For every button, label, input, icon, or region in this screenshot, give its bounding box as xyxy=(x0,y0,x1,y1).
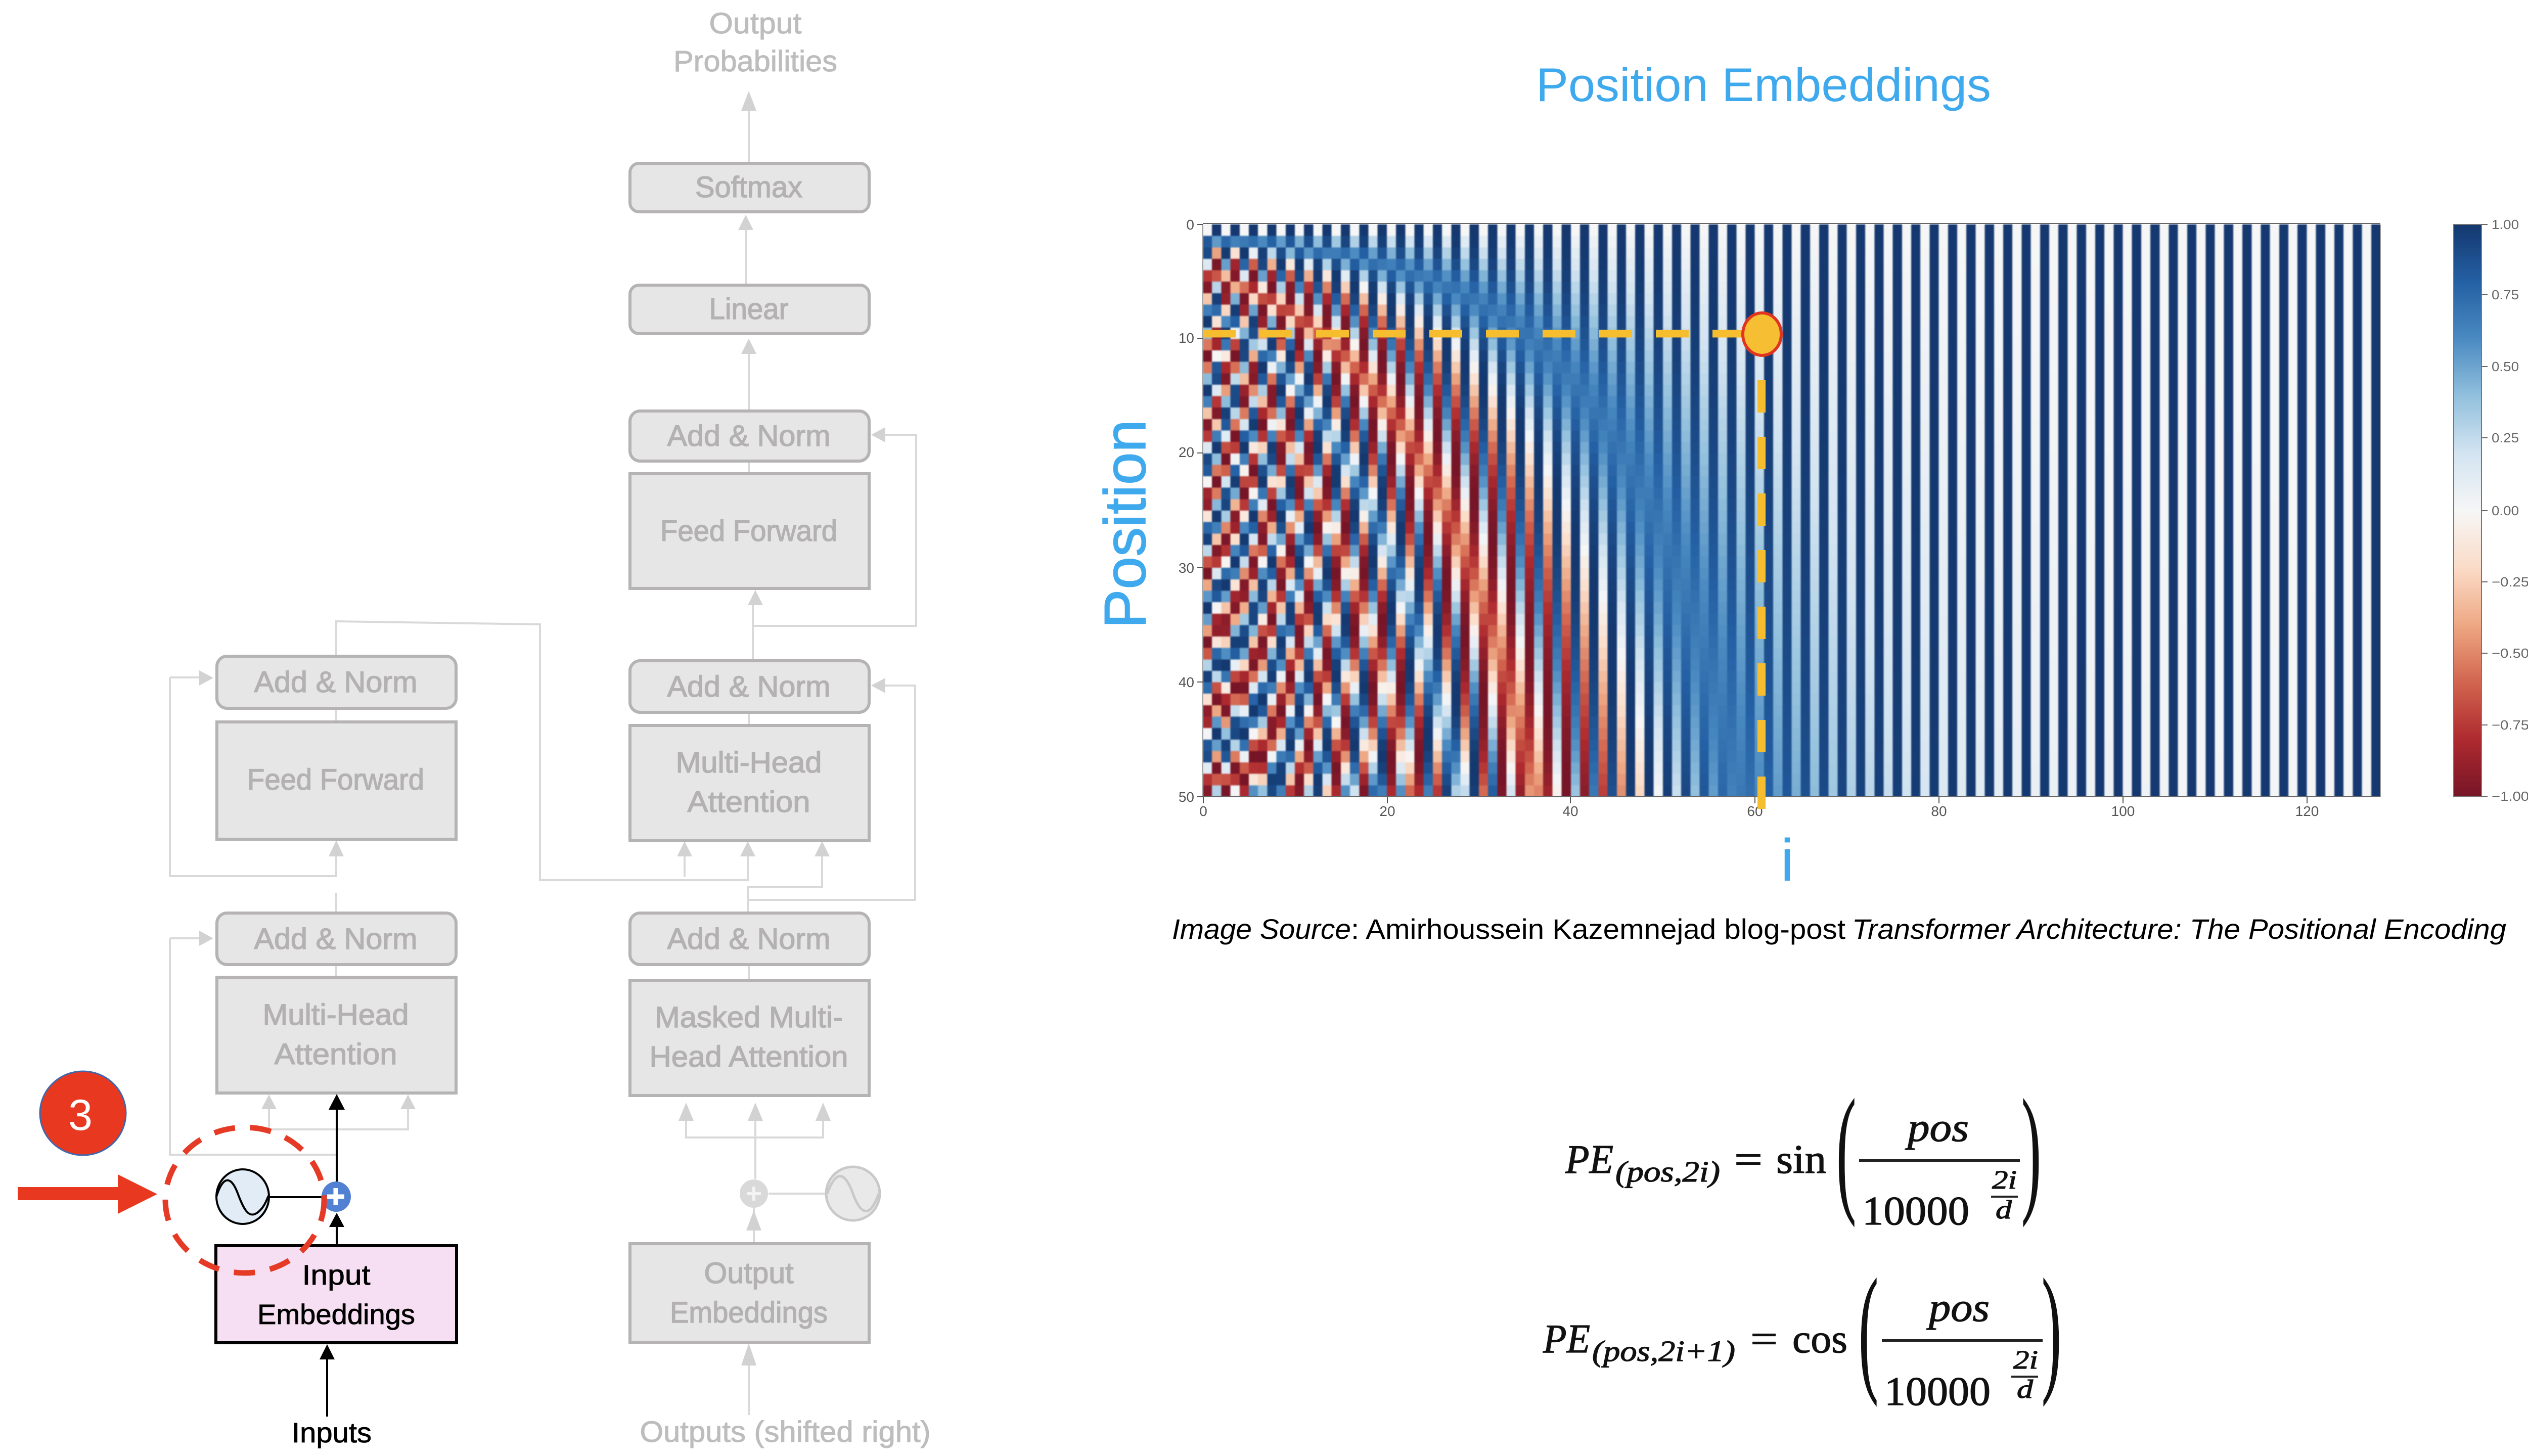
formula: sine positional encoding: sin xyxy=(1776,1138,1826,1182)
box: encoder lower Add and Norm xyxy=(217,913,456,965)
formula: sine positional encoding: = xyxy=(1734,1138,1763,1182)
chart axes: 0 xyxy=(1199,803,1207,819)
icon: greyed decoder plus xyxy=(740,1179,768,1208)
highlight: dashed row guide xyxy=(1203,330,1744,338)
caption: image source: : Amirhoussein Kazemnejad blog-post xyxy=(1351,913,1845,945)
formula: sine positional encoding: 2i xyxy=(1992,1166,2017,1195)
box: Output Embeddings xyxy=(630,1244,869,1342)
axis label: i: i xyxy=(1781,827,1794,894)
highlight: dashed column guide xyxy=(1757,380,1766,810)
box: Input Embeddings: Input xyxy=(302,1259,371,1291)
box: Linear: Linear xyxy=(709,293,789,326)
formula: cosine positional encoding: ) xyxy=(2042,1251,2061,1407)
formula: cosine positional encoding: ( xyxy=(1859,1251,1878,1407)
label: Inputs: Inputs xyxy=(292,1417,372,1448)
title: Position Embeddings xyxy=(1536,58,1991,111)
box: decoder lower Add and Norm: Add & Norm xyxy=(667,923,830,956)
box: Output Embeddings: Output xyxy=(704,1257,794,1290)
formula: sine positional encoding: 10000 xyxy=(1862,1189,1969,1234)
box: encoder lower Add and Norm: Add & Norm xyxy=(254,923,418,956)
formula: sine positional encoding: ) xyxy=(2021,1071,2041,1227)
label: Outputs (shifted right): Outputs (shifted right) xyxy=(640,1416,930,1448)
icon: greyed decoder sine wave xyxy=(826,1167,880,1220)
box: decoder Multi-Head Attention: Attention xyxy=(688,786,810,818)
box: decoder Multi-Head Attention: Multi-Head xyxy=(675,746,822,779)
chart axes: 40 xyxy=(1562,803,1578,819)
chart axes: 80 xyxy=(1931,803,1947,819)
box: decoder Feed Forward xyxy=(630,474,869,588)
label: Output Probabilities xyxy=(673,7,837,78)
formula: cosine positional encoding: d xyxy=(2017,1375,2034,1404)
colorbar: 0.00 xyxy=(2492,503,2519,518)
box: decoder Feed Forward: Feed Forward xyxy=(660,515,837,548)
arrow: red pointer xyxy=(18,1174,157,1214)
chart axes: 20 xyxy=(1379,803,1395,819)
colorbar: −0.75 xyxy=(2492,717,2528,733)
formula: cosine positional encoding xyxy=(1543,1251,2061,1414)
formula: cosine positional encoding: 2i xyxy=(2013,1346,2038,1375)
badge: step number 3: 3 xyxy=(68,1091,93,1140)
box: encoder Multi-Head Attention: Attention xyxy=(274,1038,397,1071)
chart axes: 0 xyxy=(1186,217,1194,233)
box: Linear xyxy=(630,285,869,334)
colorbar: −1.00 xyxy=(2492,789,2528,804)
box: encoder top Add and Norm xyxy=(217,656,456,708)
box: decoder lower Add and Norm xyxy=(630,913,869,965)
formula: cosine positional encoding: pos xyxy=(1926,1286,1990,1330)
box: encoder Multi-Head Attention: Multi-Head xyxy=(263,998,409,1031)
badge: step number 3 xyxy=(40,1071,126,1155)
box: encoder top Add and Norm: Add & Norm xyxy=(254,666,418,699)
heatmap: position embeddings matrix xyxy=(1203,224,2380,797)
formula: sine positional encoding: pos xyxy=(1905,1106,1969,1150)
arrow: black path from plus to attention xyxy=(329,1094,345,1182)
formula: sine positional encoding: d xyxy=(1996,1196,2012,1224)
box: Input Embeddings: Embeddings xyxy=(257,1298,415,1330)
box: Softmax xyxy=(630,163,869,212)
caption: image source: Image Source xyxy=(1172,913,1351,945)
colorbar: 1.00 xyxy=(2492,217,2519,232)
box: decoder Multi-Head Attention xyxy=(630,725,869,841)
icon: plus circle xyxy=(322,1181,351,1212)
box: Input Embeddings xyxy=(216,1246,457,1343)
chart axes: 30 xyxy=(1179,560,1194,576)
box: encoder Multi-Head Attention xyxy=(217,977,456,1093)
box: decoder middle Add and Norm: Add & Norm xyxy=(667,670,830,703)
chart axes: 100 xyxy=(2111,803,2135,819)
formula: cosine positional encoding: = xyxy=(1750,1317,1778,1361)
colorbar: 0.75 xyxy=(2492,287,2519,302)
chart axes: 40 xyxy=(1179,674,1194,690)
label: Output Probabilities: Probabilities xyxy=(673,45,837,78)
formula: sine positional encoding: ( xyxy=(1836,1071,1856,1227)
arrow: black path from embeddings to plus xyxy=(329,1213,344,1245)
box: decoder top Add and Norm: Add & Norm xyxy=(667,420,830,452)
box: encoder Feed Forward xyxy=(217,722,456,839)
colorbar: −0.25 xyxy=(2492,574,2528,589)
box: encoder Feed Forward: Feed Forward xyxy=(247,763,424,796)
caption: image source: Transformer Architecture: The Positional Encoding xyxy=(1852,913,2506,945)
chart axes: 50 xyxy=(1179,789,1194,805)
chart axes: 60 xyxy=(1747,803,1763,819)
callout: dashed red circle xyxy=(165,1127,324,1273)
box: decoder top Add and Norm xyxy=(630,411,869,461)
chart axes: 10 xyxy=(1179,330,1194,346)
axis label: Position: Position xyxy=(1092,420,1158,628)
box: Masked Multi-Head Attention: Head Attention xyxy=(649,1040,848,1073)
icon: sine wave positional encoding xyxy=(216,1169,269,1224)
formula: cosine positional encoding: cos xyxy=(1792,1317,1847,1361)
connector: sine to plus xyxy=(269,1196,324,1198)
box: Masked Multi-Head Attention: Masked Multi- xyxy=(655,1001,843,1034)
formula: sine positional encoding xyxy=(1565,1071,2041,1234)
colorbar xyxy=(2454,217,2528,804)
chart axes xyxy=(1179,217,2380,819)
formula: cosine positional encoding: PE xyxy=(1543,1317,1590,1361)
chart axes: 120 xyxy=(2295,803,2319,819)
formula: cosine positional encoding: 10000 xyxy=(1884,1370,1991,1414)
box: Softmax: Softmax xyxy=(695,171,802,204)
box: decoder middle Add and Norm xyxy=(630,661,869,712)
formula: sine positional encoding: (pos,2i) xyxy=(1615,1155,1720,1188)
formula: cosine positional encoding: (pos,2i+1) xyxy=(1592,1335,1735,1368)
panel: greyed transformer connectors xyxy=(170,91,916,1415)
caption: image source xyxy=(1172,913,2506,945)
colorbar: 0.50 xyxy=(2492,359,2519,374)
arrow: inputs to embeddings xyxy=(320,1344,335,1417)
colorbar: −0.50 xyxy=(2492,646,2528,661)
formula: sine positional encoding: PE xyxy=(1565,1138,1613,1182)
colorbar: 0.25 xyxy=(2492,430,2519,445)
label: Output Probabilities: Output xyxy=(709,7,802,40)
box: Output Embeddings: Embeddings xyxy=(670,1296,828,1329)
box: Masked Multi-Head Attention xyxy=(630,980,869,1096)
highlight: selected cell marker xyxy=(1743,313,1781,355)
chart axes: 20 xyxy=(1179,444,1194,460)
